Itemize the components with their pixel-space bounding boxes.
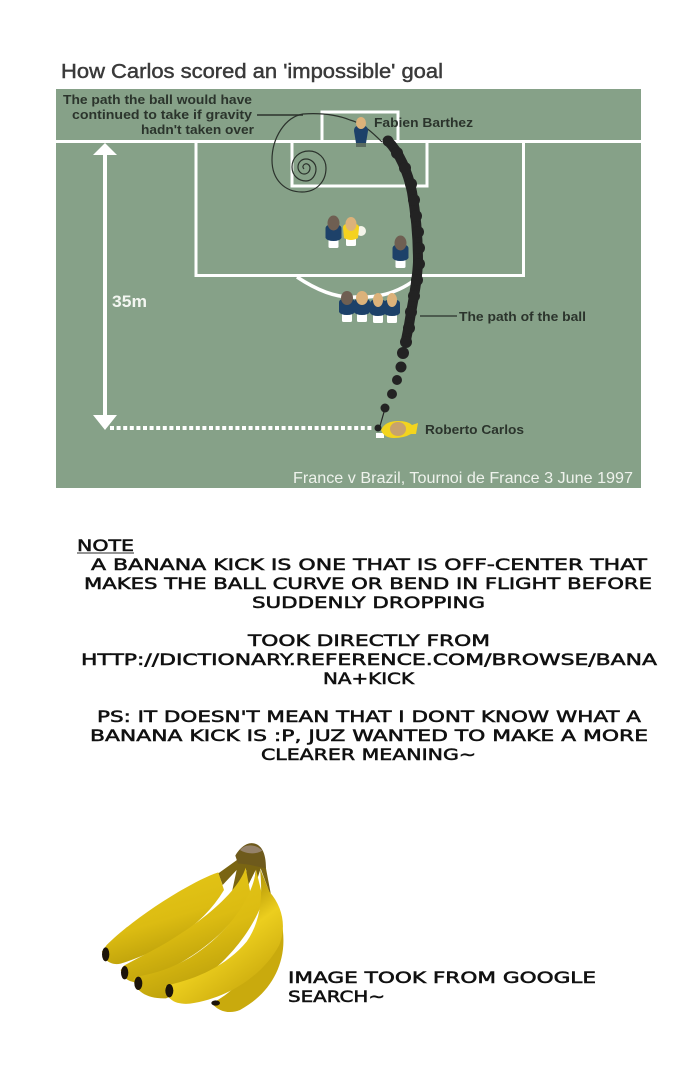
text block: postscript: CLEARER MEANING~: [261, 745, 476, 764]
text block: source: HTTP://DICTIONARY.REFERENCE.COM/BROWSE/BANA: [81, 650, 657, 669]
text block: postscript: BANANA KICK IS :P, JUZ WANTED TO MAKE A MORE: [90, 726, 648, 745]
text block: source: NA+KICK: [323, 669, 415, 688]
text block: postscript: [90, 707, 648, 764]
label: Roberto Carlos: Roberto Carlos: [425, 423, 524, 437]
note heading: NOTE: [77, 536, 134, 555]
text block: definition: [84, 555, 652, 612]
text block: source: [81, 631, 657, 688]
ball path: [380, 136, 425, 426]
text block: definition: MAKES THE BALL CURVE OR BEND IN FLIGHT BEFORE: [84, 574, 652, 593]
image credit: SEARCH~: [288, 987, 385, 1006]
match caption: France v Brazil, Tournoi de France 3 June 1997: [293, 470, 633, 487]
pitch background: [56, 89, 641, 488]
text block: definition: SUDDENLY DROPPING: [252, 593, 485, 612]
distance arrow: 35m: [93, 143, 372, 430]
text block: source: TOOK DIRECTLY FROM: [247, 631, 490, 650]
pitch markings: [56, 112, 641, 297]
player: goalkeeper Fabien Barthez: [354, 117, 368, 147]
leader line: path of ball: [420, 315, 457, 317]
banana tips: [102, 947, 220, 1006]
title: How Carlos scored an 'impossible' goal: [61, 61, 443, 83]
annotation: gravity path: [63, 93, 254, 137]
player: Roberto Carlos: [374, 421, 418, 438]
banana 3: [133, 869, 263, 998]
banana stems: [218, 859, 272, 898]
annotation: gravity path: The path the ball would have: [63, 93, 252, 107]
defensive wall: [339, 291, 400, 323]
banana 1: [102, 872, 224, 964]
panel: football pitch diagram: [56, 89, 641, 488]
label: path of the ball: The path of the ball: [459, 310, 586, 324]
label: Fabien Barthez: Fabien Barthez: [374, 116, 473, 130]
banana 4: [165, 868, 283, 1004]
text block: definition: A BANANA KICK IS ONE THAT IS OFF-CENTER THAT: [91, 555, 647, 574]
text block: postscript: PS: IT DOESN'T MEAN THAT I DONT KNOW WHAT A: [97, 707, 641, 726]
annotation: gravity path: continued to take if gravity: [72, 108, 252, 122]
banana 2: [121, 868, 251, 982]
distance label: 35m: [112, 292, 147, 311]
banana 5: [212, 903, 283, 1012]
annotation: gravity path: hadn't taken over: [141, 123, 254, 137]
defender: right: [392, 236, 408, 268]
image credit: [288, 968, 596, 1006]
banana crown: [235, 843, 266, 868]
spiral: path without gravity: [257, 114, 382, 192]
image credit: IMAGE TOOK FROM GOOGLE: [288, 968, 596, 987]
defender: central pair: [326, 216, 366, 248]
image: banana bunch: [102, 843, 283, 1012]
